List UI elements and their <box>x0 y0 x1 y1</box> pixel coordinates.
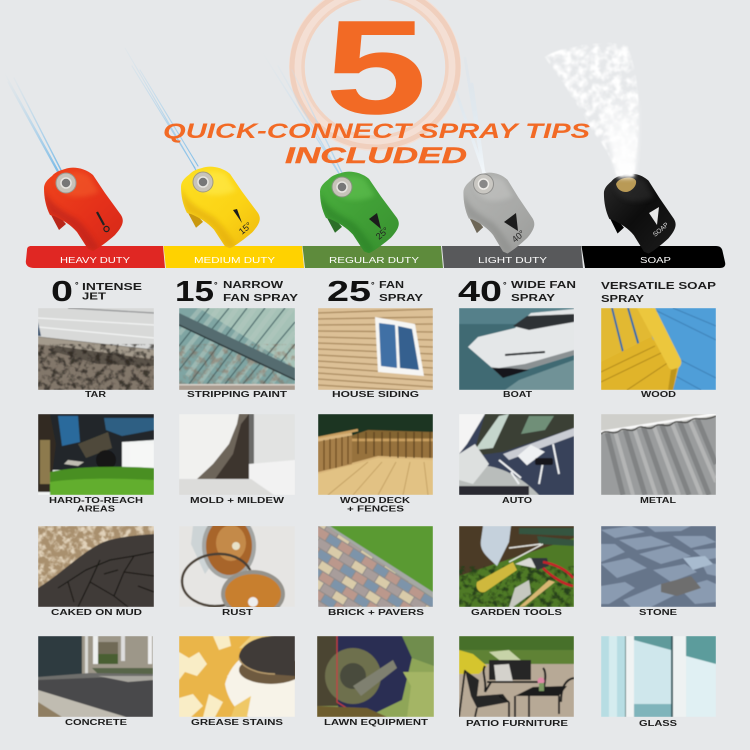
panel: metal <box>601 414 716 505</box>
header: 15 degree narrow fan spray: ° <box>214 280 218 290</box>
panel: wood deck + fences <box>318 414 433 514</box>
band: medium duty: MEDIUM DUTY <box>194 256 276 265</box>
header: 0 degree intense jet: ° <box>75 280 79 290</box>
header: 40 degree wide fan spray: ° <box>503 280 507 290</box>
panel: stone <box>601 526 716 617</box>
panel: hard-to-reach areas <box>38 414 154 514</box>
tip: green 25 degree: 25° <box>374 225 391 242</box>
caption: WOOD <box>641 390 676 399</box>
tip: gray 40 degree <box>463 173 534 253</box>
photo: house siding <box>318 308 433 390</box>
header: versatile soap spray <box>601 281 716 305</box>
tip: black soap: SOAP <box>652 222 670 239</box>
header: 25 degree fan spray <box>327 276 423 308</box>
band: heavy duty <box>26 246 165 268</box>
tip: red 0 degree <box>44 168 123 251</box>
caption: HARD-TO-REACH <box>49 496 143 505</box>
panel: caked on mud <box>38 526 154 617</box>
panel: wood <box>601 308 716 399</box>
photo: stripping paint <box>179 308 295 390</box>
panel: concrete <box>38 636 153 727</box>
photo: brick + pavers <box>318 526 433 607</box>
caption: CONCRETE <box>65 718 128 727</box>
caption: PATIO FURNITURE <box>466 719 569 728</box>
header: 40 degree wide fan spray <box>458 276 576 308</box>
caption: METAL <box>640 496 676 505</box>
heading line 2: INCLUDED <box>285 143 467 168</box>
photo: caked on mud <box>38 526 154 607</box>
header: 40 degree wide fan spray: WIDE FAN <box>511 280 576 291</box>
caption: GLASS <box>639 719 678 728</box>
caption: GREASE STAINS <box>191 718 284 727</box>
photo: wood deck + fences <box>318 414 433 495</box>
ring behind the number <box>292 0 458 147</box>
header: versatile soap spray: SPRAY <box>601 294 644 305</box>
caption: STRIPPING PAINT <box>187 390 287 399</box>
header: 0 degree intense jet: 0 <box>51 276 73 308</box>
caption: BOAT <box>503 390 532 399</box>
header: 40 degree wide fan spray: SPRAY <box>511 293 555 304</box>
caption: MOLD + MILDEW <box>190 496 285 505</box>
caption: WOOD DECK <box>340 496 410 505</box>
panel: rust <box>179 513 295 618</box>
tip: yellow 15 degree <box>181 167 260 248</box>
caption: BRICK + PAVERS <box>328 608 425 617</box>
photo: garden tools <box>459 526 574 607</box>
heading line 1: QUICK-CONNECT SPRAY TIPS <box>163 120 590 143</box>
band: light duty <box>442 246 583 268</box>
column headers <box>51 276 716 308</box>
photo: concrete <box>38 636 153 717</box>
caption: AUTO <box>502 496 532 505</box>
photo: hard-to-reach areas <box>38 414 154 495</box>
band: medium duty <box>164 246 304 268</box>
band: light duty: LIGHT DUTY <box>478 256 548 265</box>
caption: HOUSE SIDING <box>332 390 419 399</box>
tip: green 25 degree <box>320 172 399 253</box>
header: 40 degree wide fan spray: 40 <box>458 276 502 308</box>
band: soap <box>582 246 725 268</box>
caption: LAWN EQUIPMENT <box>324 718 428 727</box>
soap foam spray <box>545 43 639 178</box>
duty color bar <box>26 246 725 268</box>
header: 0 degree intense jet: INTENSE <box>82 282 142 293</box>
panel: brick + pavers <box>318 526 433 617</box>
photo: glass <box>601 636 716 717</box>
caption: TAR <box>85 390 106 399</box>
caption: AREAS <box>77 504 116 514</box>
photo: auto <box>459 414 574 495</box>
photo: lawn equipment <box>317 636 434 717</box>
panel: garden tools <box>459 526 574 617</box>
header: 25 degree fan spray: 25 <box>327 276 371 308</box>
spray tips <box>44 43 676 254</box>
panel: auto <box>459 414 574 505</box>
band: regular duty: REGULAR DUTY <box>329 256 420 265</box>
photo: rust <box>180 526 286 607</box>
header: 15 degree narrow fan spray: NARROW <box>223 280 284 291</box>
header: 25 degree fan spray: SPRAY <box>379 293 423 304</box>
caption: RUST <box>222 608 253 617</box>
header: 15 degree narrow fan spray: FAN SPRAY <box>223 293 298 304</box>
tip: gray 40 degree: 40° <box>510 228 527 245</box>
panel: lawn equipment <box>317 636 434 727</box>
panel: mold + mildew <box>179 414 295 505</box>
photo: patio furniture <box>459 636 574 717</box>
header: 0 degree intense jet <box>51 276 142 308</box>
panel: patio furniture <box>459 636 574 728</box>
header: 15 degree narrow fan spray: 15 <box>175 276 214 308</box>
caption <box>49 496 143 514</box>
panel: glass <box>601 636 716 728</box>
panel: house siding <box>318 308 433 399</box>
photo: wood <box>601 308 716 390</box>
spray jets <box>4 48 485 178</box>
header: 5 quick-connect spray tips included <box>4 0 590 178</box>
photo: metal <box>601 414 716 495</box>
header: 25 degree fan spray: ° <box>371 280 375 290</box>
header: 0 degree intense jet: JET <box>82 292 106 302</box>
caption: + FENCES <box>347 504 405 514</box>
caption <box>340 496 410 514</box>
caption: CAKED ON MUD <box>51 608 142 617</box>
photo: grease stains <box>179 636 295 717</box>
header: 15 degree narrow fan spray <box>175 276 298 308</box>
caption: GARDEN TOOLS <box>471 608 563 617</box>
panel: tar <box>38 308 154 399</box>
panel: stripping paint <box>179 308 295 399</box>
photo: stone <box>601 526 716 607</box>
tip: black soap <box>604 174 676 254</box>
photo: boat <box>459 308 574 390</box>
photo: tar <box>38 308 154 390</box>
panel: boat <box>459 308 574 399</box>
header: 25 degree fan spray: FAN <box>379 280 404 291</box>
caption: STONE <box>639 608 678 617</box>
band: soap: SOAP <box>640 256 671 265</box>
header: versatile soap spray: VERSATILE SOAP <box>601 281 716 292</box>
tip: yellow 15 degree: 15° <box>237 220 254 237</box>
panel: grease stains <box>179 636 303 727</box>
band: regular duty <box>302 246 443 268</box>
band: heavy duty: HEAVY DUTY <box>60 256 131 265</box>
photo: mold + mildew <box>179 414 294 495</box>
